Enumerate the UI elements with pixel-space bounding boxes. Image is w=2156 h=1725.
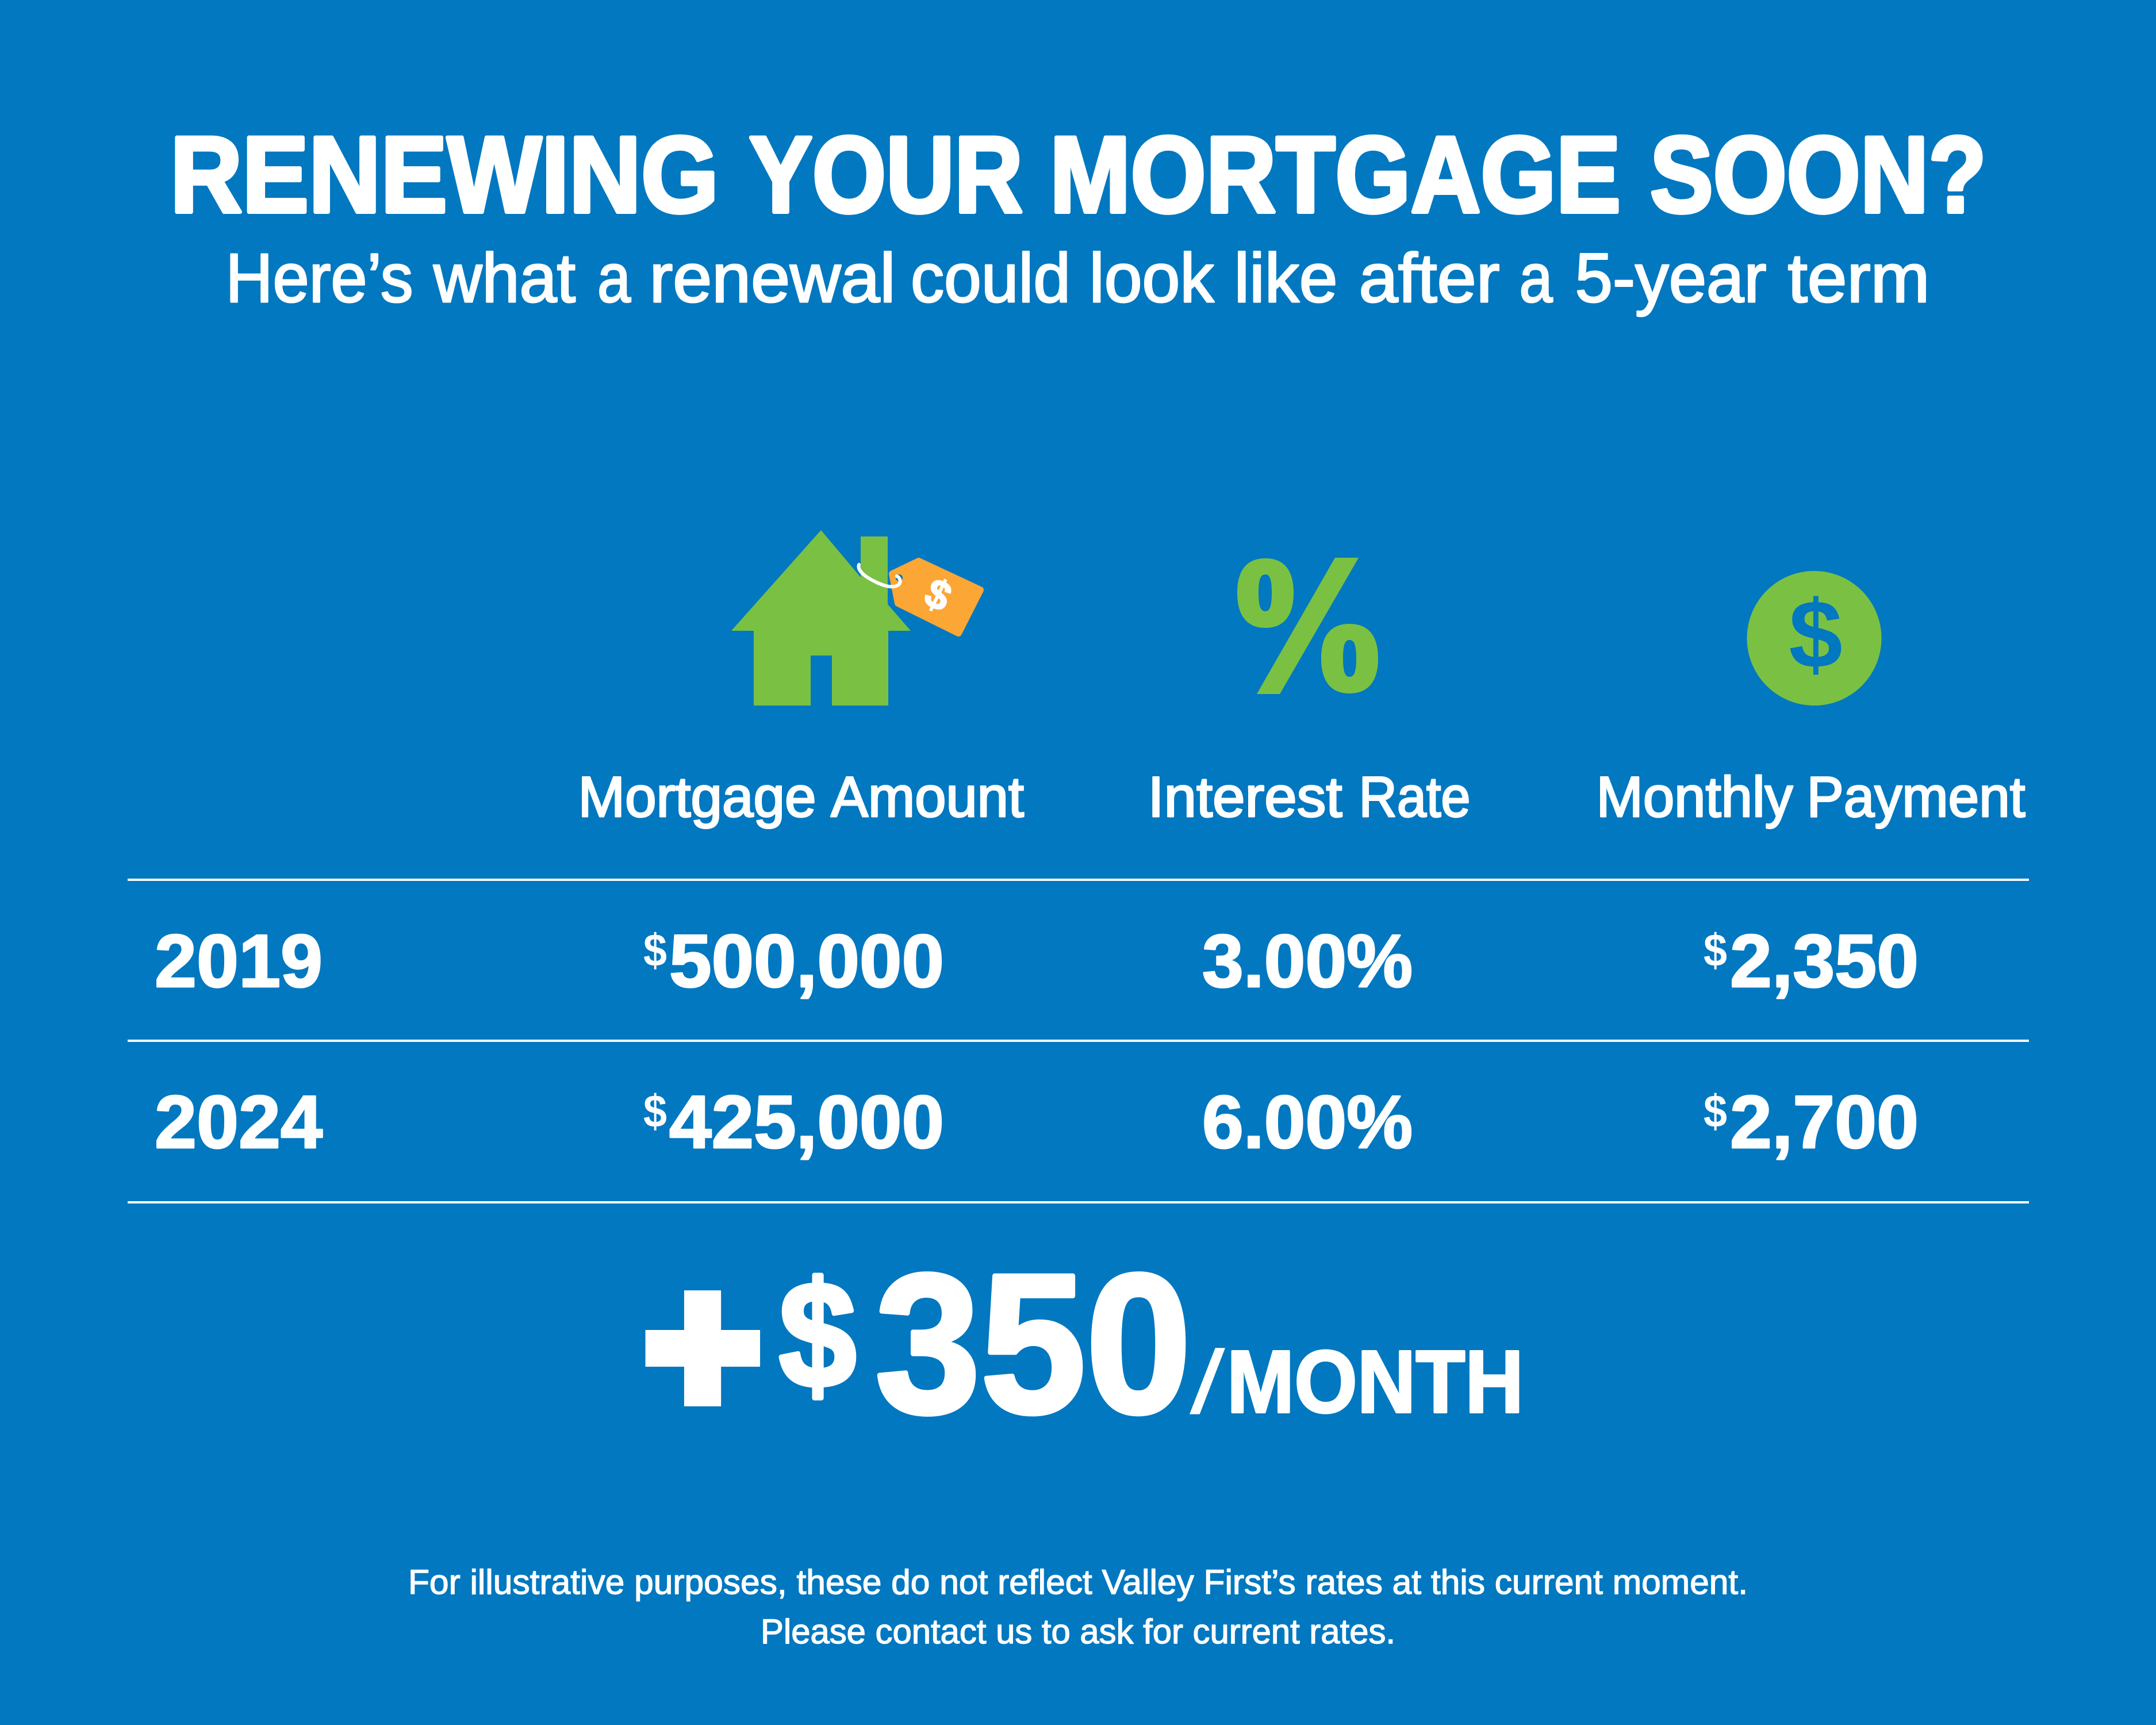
callout: plus 350 per month <box>645 1233 1524 1457</box>
callout: plus 350 per month: + <box>645 1235 761 1457</box>
callout: plus 350 per month: / <box>1190 1332 1226 1433</box>
footnote <box>408 1563 1748 1651</box>
subtitle: like <box>1234 239 1337 317</box>
header: interest rate <box>1148 765 1471 829</box>
header: monthly payment: Monthly <box>1596 765 1793 829</box>
subtitle: renewal <box>650 239 896 317</box>
callout: plus 350 per month: 350 <box>875 1233 1191 1455</box>
icon: house with price tag <box>731 530 980 706</box>
callout: plus 350 per month: $ <box>779 1251 856 1419</box>
icon: percent sign <box>1237 558 1378 694</box>
row: 2019: $ <box>643 925 667 976</box>
header: mortgage amount: Amount <box>831 765 1024 829</box>
title: RENEWING <box>170 114 719 235</box>
title: MORTGAGE <box>1050 114 1621 235</box>
row: 2019: 2,350 <box>1730 919 1919 1003</box>
icon: dollar coin <box>1747 571 1881 706</box>
header: interest rate: Interest <box>1148 765 1342 829</box>
row: 2019 <box>155 919 1919 1003</box>
footnote: For illustrative purposes, these do not reflect Valley First’s rates at this current moment. <box>408 1563 1748 1601</box>
subtitle: could <box>911 239 1071 317</box>
header: mortgage amount: Mortgage <box>578 765 816 829</box>
subtitle: a <box>597 239 631 317</box>
subtitle <box>225 239 1929 317</box>
footnote: Please contact us to ask for current rates. <box>761 1612 1395 1651</box>
table rules <box>128 879 2029 1203</box>
title: YOUR <box>749 114 1023 235</box>
row: 2019: 3.00% <box>1202 919 1413 1003</box>
header: interest rate: Rate <box>1359 765 1471 829</box>
header: monthly payment: Payment <box>1806 765 2025 829</box>
row: 2024: 6.00% <box>1202 1080 1413 1164</box>
subtitle: look <box>1089 239 1214 317</box>
row: 2024: $ <box>643 1086 667 1137</box>
subtitle: term <box>1788 239 1929 317</box>
row: 2024: 425,000 <box>669 1080 944 1164</box>
subtitle: what <box>433 239 576 317</box>
row: 2019: 500,000 <box>669 919 944 1003</box>
subtitle: 5-year <box>1575 239 1766 317</box>
title <box>170 114 1986 235</box>
header: mortgage amount <box>578 765 1024 829</box>
row: 2024 <box>155 1080 1919 1164</box>
row: 2024: $ <box>1704 1086 1727 1137</box>
row: 2019: 2019 <box>155 919 323 1003</box>
subtitle: Here’s <box>225 239 413 317</box>
title: SOON? <box>1650 114 1986 235</box>
row: 2019: $ <box>1704 925 1727 976</box>
subtitle: a <box>1519 239 1553 317</box>
icon: dollar coin: $ <box>1789 580 1843 688</box>
row: 2024: 2024 <box>155 1080 323 1164</box>
icon: house with price tag: $ <box>918 569 958 621</box>
row: 2024: 2,700 <box>1730 1080 1919 1164</box>
header: monthly payment <box>1596 765 2025 829</box>
subtitle: after <box>1359 239 1499 317</box>
callout: plus 350 per month: MONTH <box>1227 1332 1524 1431</box>
